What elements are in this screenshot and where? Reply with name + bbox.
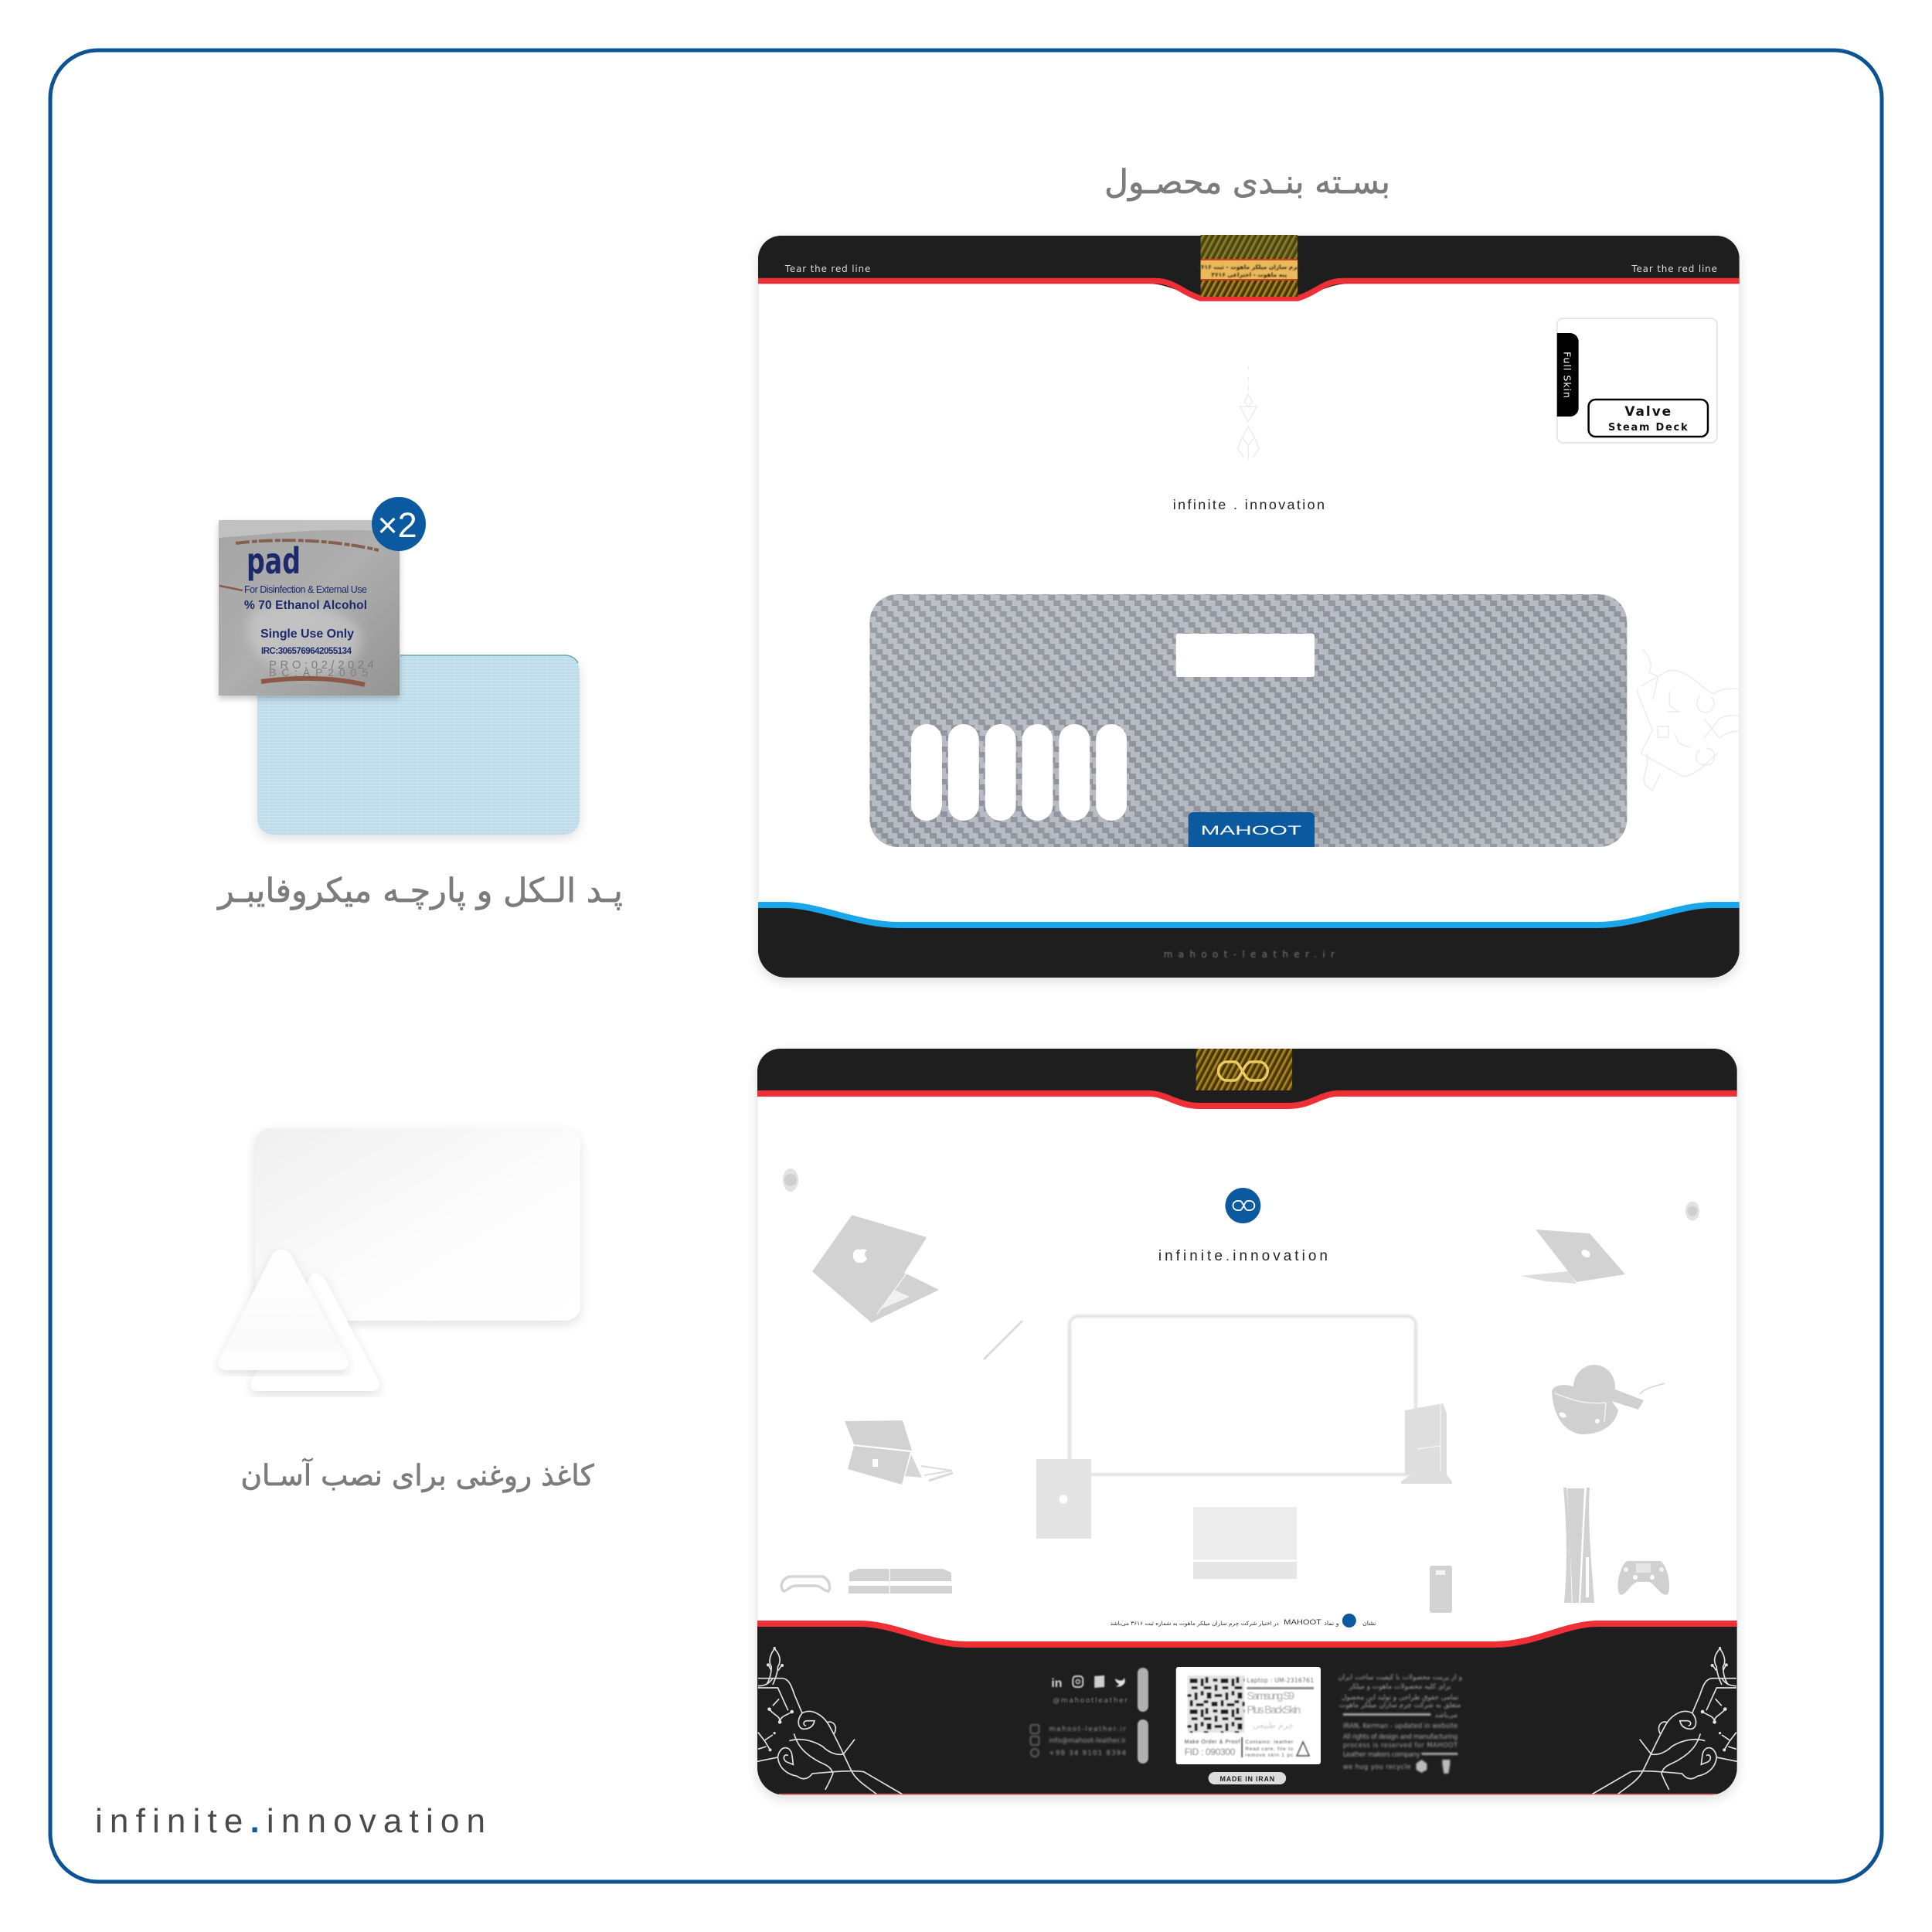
line ornament left bbox=[757, 1647, 902, 1794]
front triangle bbox=[219, 1250, 349, 1370]
device: vr headset bbox=[1552, 1365, 1665, 1434]
carbon skin: MAHOOT bbox=[1201, 823, 1301, 838]
panel: package back bbox=[757, 1043, 1737, 1801]
camera cutout bbox=[1176, 634, 1315, 677]
device: controller left bbox=[781, 1577, 830, 1591]
contact lines bbox=[1031, 1725, 1127, 1757]
product label box bbox=[1557, 318, 1717, 443]
tear label right: Tear the red line bbox=[1631, 264, 1717, 274]
legal text block: و از پرینت محصولات با کیفیت ساخت ایران bbox=[1338, 1674, 1462, 1682]
legal text block: برای کلیه محصولات ماهوت و میلکر bbox=[1348, 1683, 1451, 1691]
social icons bbox=[1051, 1675, 1125, 1690]
faint side ornament bbox=[1637, 649, 1744, 791]
contact lines: info@mahoot-leather.ir bbox=[1049, 1736, 1127, 1744]
contact lines: +98 34 9101 8394 bbox=[1049, 1749, 1126, 1757]
device: watch right bbox=[1685, 1201, 1699, 1221]
product label box: Valve bbox=[1624, 403, 1671, 419]
microfiber cloth bbox=[257, 655, 580, 835]
made in iran pill: MADE IN IRAN bbox=[1220, 1775, 1274, 1783]
carbon skin bbox=[869, 594, 1627, 847]
product label box: Steam Deck bbox=[1608, 422, 1688, 434]
legal line: در اختیار شرکت چرم سازان میلکر ماهوت به شماره ثبت ۳۶۱۶ می‌باشد bbox=[1111, 1620, 1279, 1627]
qr label card: Samsung S9 bbox=[1247, 1689, 1294, 1702]
device: console tower bbox=[1401, 1403, 1452, 1484]
hologram seal bbox=[1196, 1049, 1292, 1090]
social pills bbox=[1138, 1668, 1148, 1764]
qr label card: Read care, file to bbox=[1245, 1747, 1294, 1752]
badge: times two: ×2 bbox=[377, 505, 417, 545]
legal text block: تمامی حقوق طراحی و تولید این محصول bbox=[1342, 1694, 1459, 1702]
alcohol sachet: PRO:02/2024 bbox=[269, 658, 374, 672]
qr label card: چرم طبیعی bbox=[1253, 1720, 1294, 1730]
device: phone bbox=[1430, 1566, 1452, 1613]
centre sheet outline bbox=[1070, 1316, 1416, 1475]
oil paper sheet bbox=[255, 1128, 580, 1321]
legal text block: IRAN, Kerman - updated in website bbox=[1343, 1722, 1458, 1730]
panel: package front bbox=[758, 232, 1744, 981]
line ornament right bbox=[1592, 1647, 1737, 1794]
qr label card bbox=[1176, 1667, 1321, 1764]
tear label left: Tear the red line bbox=[784, 264, 870, 274]
legal text block: می‌باشد bbox=[1435, 1712, 1458, 1719]
alcohol sachet: BC:AP2005 bbox=[269, 666, 368, 679]
legal line: نشان bbox=[1362, 1620, 1376, 1627]
made in iran pill bbox=[1209, 1772, 1286, 1784]
bottom band bbox=[757, 1624, 1737, 1801]
product label box: Full Skin bbox=[1562, 352, 1573, 398]
badge: times two bbox=[372, 497, 426, 551]
device: controller right bbox=[1617, 1561, 1669, 1595]
legal text block: Leather makers company bbox=[1343, 1750, 1420, 1758]
faint emblem bbox=[1237, 366, 1259, 459]
qr label card: Contains: leather bbox=[1245, 1740, 1294, 1745]
alcohol sachet: IRC:3065769642055134 bbox=[261, 647, 352, 656]
device: laptop right bbox=[1521, 1230, 1625, 1284]
card base bbox=[758, 236, 1740, 978]
top black band bbox=[758, 232, 1740, 298]
legal text block: متعلق به شرکت چرم سازان میلکر ماهوت bbox=[1339, 1702, 1461, 1709]
card base bbox=[757, 1049, 1737, 1795]
device: ipad bbox=[1036, 1459, 1091, 1539]
legal text block: process is reserved for MAHOOT bbox=[1343, 1741, 1458, 1749]
hologram seal bbox=[1197, 235, 1301, 297]
device: watch left bbox=[783, 1168, 798, 1192]
slogan: infinite . innovation bbox=[1173, 497, 1325, 512]
brand tab bbox=[1189, 812, 1315, 847]
legal line bbox=[1111, 1614, 1376, 1628]
device: folio keyboard bbox=[1193, 1507, 1297, 1579]
device: stylus bbox=[984, 1321, 1022, 1359]
device: ps5 bbox=[1563, 1488, 1594, 1603]
alcohol sachet: pad bbox=[247, 540, 301, 582]
logo circle bbox=[1225, 1188, 1260, 1223]
qr label card: Laptop : UM-2316761 bbox=[1247, 1677, 1314, 1684]
brand slogan footer: infinite.innovation bbox=[95, 1802, 485, 1840]
website: mahoot-leather.ir bbox=[1164, 949, 1335, 960]
back triangle bbox=[250, 1273, 379, 1391]
qr label card: Plus BackSkin bbox=[1247, 1703, 1301, 1716]
device: laptop open left bbox=[814, 1216, 937, 1321]
qr label card: remove skin 1 pc bbox=[1245, 1753, 1294, 1758]
caption: oil paper: کاغذ روغنی برای نصب آسـان bbox=[240, 1458, 594, 1493]
panel: device silhouettes bbox=[781, 1168, 1699, 1613]
contact lines: mahoot-leather.ir bbox=[1049, 1725, 1127, 1733]
legal text block: All rights of design and manufacturing bbox=[1343, 1733, 1458, 1740]
qr label card: FID : 090300 bbox=[1185, 1747, 1236, 1757]
caption: alcohol pad and microfiber: پـد الـکل و پارچـه میکروفایبـر bbox=[216, 872, 623, 910]
hologram seal: پنه ماهوت - اختراعی ۳۶۱۶ bbox=[1212, 271, 1287, 278]
alcohol sachet bbox=[219, 520, 400, 696]
vent slots bbox=[911, 724, 1127, 821]
hologram seal: چرم سازان میلکر ماهوت - ثبت ۳۶۱۶ bbox=[1197, 264, 1301, 270]
device: ps4 bbox=[849, 1569, 952, 1594]
device: surface tablet bbox=[845, 1420, 953, 1485]
social handle: @mahootleather bbox=[1053, 1697, 1128, 1705]
bottom band bbox=[758, 905, 1740, 981]
slogan: infinite.innovation bbox=[1158, 1248, 1328, 1264]
legal text block: we hug you recycle bbox=[1343, 1763, 1411, 1770]
alcohol sachet: For Disinfection & External Use bbox=[244, 584, 367, 595]
legal line: و نماد bbox=[1324, 1620, 1339, 1627]
top black band bbox=[757, 1043, 1737, 1106]
legal text block bbox=[1338, 1674, 1462, 1774]
social icons: in bbox=[1051, 1677, 1063, 1690]
alcohol sachet: % 70 Ethanol Alcohol bbox=[244, 599, 367, 612]
alcohol sachet: Single Use Only bbox=[260, 628, 354, 641]
qr label card: Make Order & Proof bbox=[1185, 1740, 1240, 1745]
heading: product packaging: بسـته بنـدی محصـول bbox=[1104, 164, 1390, 202]
legal line: MAHOOT bbox=[1284, 1618, 1322, 1626]
